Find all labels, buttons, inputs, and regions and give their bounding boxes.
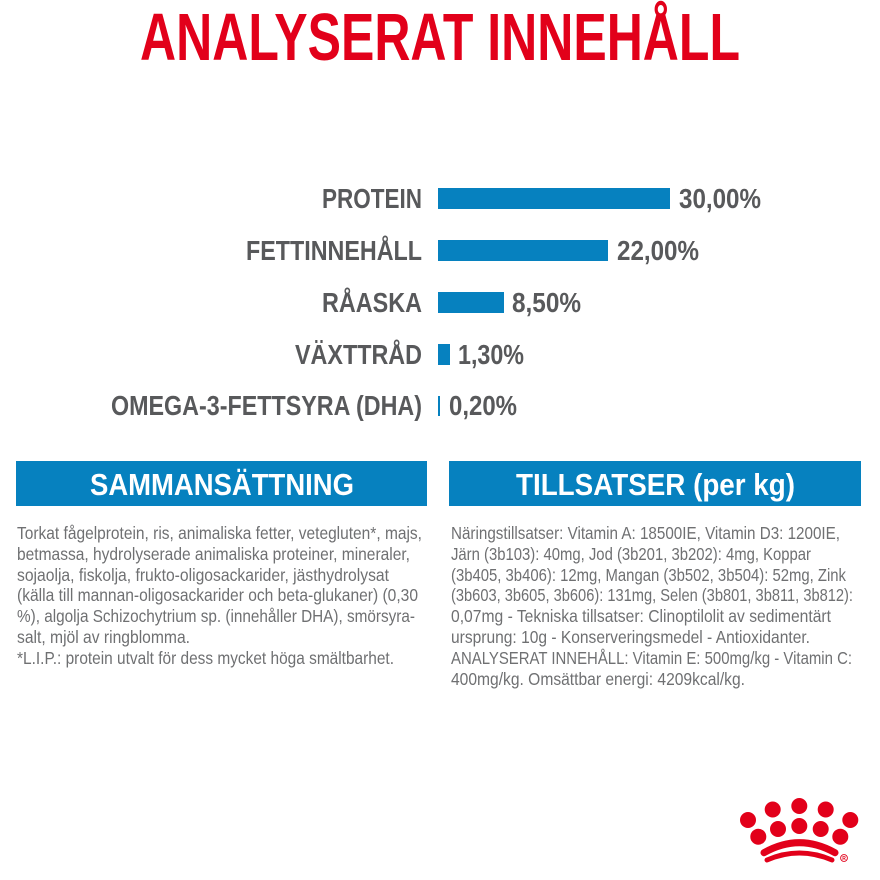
row: omega-3: 0,20% xyxy=(449,390,517,421)
heading: sammansättning: SAMMANSÄTTNING xyxy=(90,467,354,502)
row: växttråd xyxy=(295,339,524,370)
row: växttråd: VÄXTTRÅD xyxy=(295,339,422,370)
text block: composition: (källa till mannan-oligosackarider och beta-glukaner) (0,30 xyxy=(17,585,418,605)
icon: royal canin crown logo xyxy=(740,798,858,862)
text block: additives: Järn (3b103): 40mg, Jod (3b201, 3b202): 4mg, Koppar xyxy=(451,544,811,564)
text block: composition: Torkat fågelprotein, ris, animaliska fetter, vetegluten*, majs, xyxy=(17,523,422,543)
row: råaska: 8,50% xyxy=(512,287,581,318)
row: växttråd: 1,30% xyxy=(458,339,524,370)
row: protein: 30,00% xyxy=(679,183,761,214)
panel: tillsatser xyxy=(449,461,861,689)
row: omega-3: OMEGA-3-FETTSYRA (DHA) xyxy=(111,390,422,421)
row: protein xyxy=(322,183,761,214)
bar chart: analysed content xyxy=(111,183,761,421)
text block: additives xyxy=(451,523,853,689)
heading: sammansättning xyxy=(16,461,427,506)
row: råaska: RÅASKA xyxy=(322,287,422,318)
text block: composition: betmassa, hydrolyserade animaliska proteiner, mineraler, xyxy=(17,544,410,564)
icon: royal canin crown logo: R xyxy=(842,856,846,862)
row: råaska xyxy=(322,287,581,318)
panel: sammansättning xyxy=(16,461,427,668)
text block: composition: %), algolja Schizochytrium sp. (innehåller DHA), smörsyra- xyxy=(17,606,415,626)
text block: composition: sojaolja, fiskolja, frukto-oligosackarider, jästhydrolysat xyxy=(17,565,389,585)
text block: additives: 400mg/kg. Omsättbar energi: 4209kcal/kg. xyxy=(451,669,745,689)
text block: composition: salt, mjöl av ringblomma. xyxy=(17,627,190,647)
text block: composition xyxy=(17,523,422,668)
heading: tillsatser xyxy=(449,461,861,506)
row: fettinnehåll: FETTINNEHÅLL xyxy=(246,235,422,266)
row: fettinnehåll xyxy=(246,235,699,266)
row: protein: PROTEIN xyxy=(322,183,422,214)
text block: composition: *L.I.P.: protein utvalt för dess mycket höga smältbarhet. xyxy=(17,648,394,668)
row: fettinnehåll: 22,00% xyxy=(617,235,699,266)
heading: tillsatser: TILLSATSER (per kg) xyxy=(516,467,795,502)
text block: additives: ursprung: 10g - Konserveringsmedel - Antioxidanter. xyxy=(451,627,810,647)
text block: additives: 0,07mg - Tekniska tillsatser: Clinoptilolit av sedimentärt xyxy=(451,606,831,626)
